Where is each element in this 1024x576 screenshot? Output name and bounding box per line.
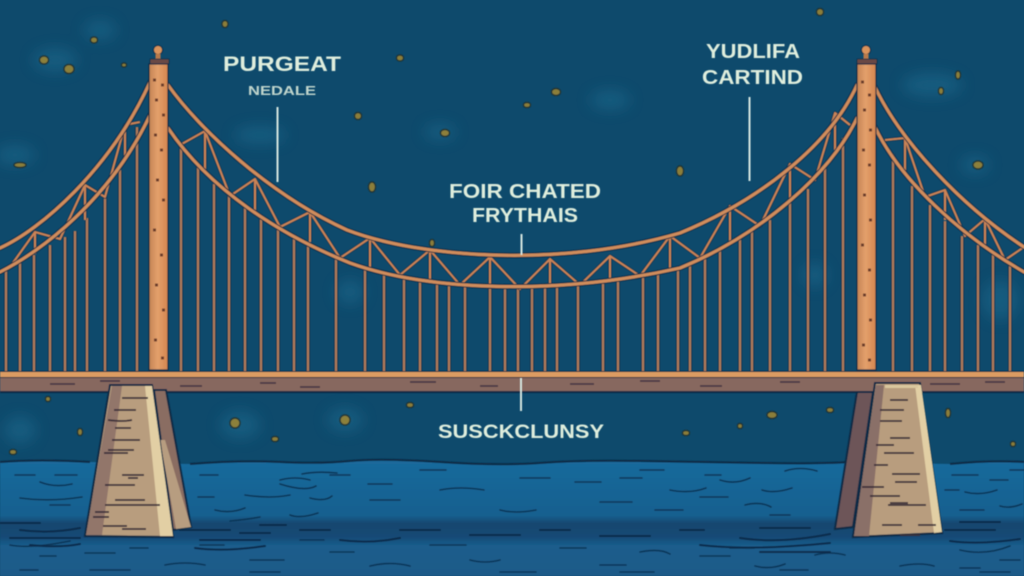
main cable chords (0, 82, 1024, 287)
background blotches (0, 20, 1018, 444)
callout: center (449, 181, 601, 255)
callout: upper right (702, 41, 803, 181)
gold speckles (10, 8, 1016, 454)
left pier (85, 385, 191, 537)
callout: upper left: PURGEAT (223, 53, 341, 76)
callout: upper left (223, 53, 341, 182)
callout: center: FOIR CHATED (449, 181, 601, 203)
water (0, 460, 1024, 576)
suspender cables (6, 127, 1010, 372)
right tower (857, 46, 877, 370)
callout: upper right: YUDLIFA (706, 41, 800, 63)
water ripples (10, 468, 1024, 572)
bridge deck (0, 371, 1024, 393)
callout: upper left: NEDALE (248, 83, 316, 98)
left tower (149, 46, 169, 370)
right pier (835, 383, 942, 537)
callout: deck: SUSCKCLUNSY (438, 422, 604, 443)
callout: upper right: CARTIND (702, 67, 803, 89)
truss webs (10, 113, 1024, 289)
callout: center: FRYTHAIS (472, 205, 578, 227)
